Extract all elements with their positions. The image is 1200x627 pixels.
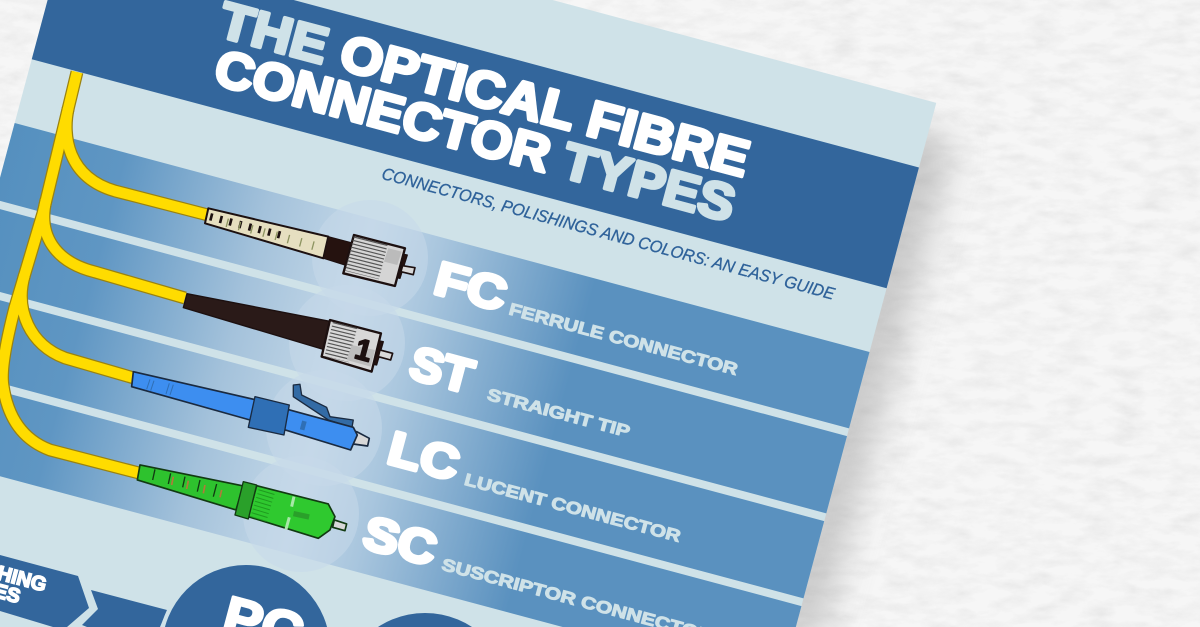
ST label: STRAIGHT TIP — [485, 385, 632, 441]
second arrow — [82, 590, 167, 627]
ST label — [405, 336, 640, 446]
LC label: LC — [383, 421, 465, 491]
ST label: ST — [405, 336, 480, 403]
SC label: SC — [358, 505, 442, 576]
connector rows — [0, 123, 870, 627]
FC connector — [205, 208, 415, 286]
LC connector — [132, 372, 369, 450]
poster drop shadow — [770, 125, 955, 627]
poster rotated layout — [0, 0, 936, 627]
title: CONNECTOR TYPES — [209, 39, 741, 232]
connection circles — [243, 200, 428, 572]
FC label: FERRULE CONNECTOR — [507, 300, 740, 379]
poster base — [0, 0, 936, 627]
LC label — [383, 421, 690, 551]
second polishing circle — [339, 613, 511, 627]
poster — [0, 0, 936, 627]
subtitle: CONNECTORS, POLISHINGS AND COLORS: AN EASY GUIDE — [380, 164, 837, 304]
row labels — [358, 250, 791, 627]
LC label: LUCENT CONNECTOR — [462, 470, 683, 546]
SC connector — [137, 465, 347, 538]
ST number tag: 1 — [351, 333, 376, 369]
ST connector — [183, 294, 393, 372]
yellow fibre cables — [2, 72, 208, 473]
SC label — [358, 505, 722, 627]
FC label: FC — [429, 251, 513, 321]
PC circle — [158, 561, 334, 627]
header band — [32, 0, 919, 288]
polishing types arrow — [0, 547, 89, 627]
FC label — [429, 251, 747, 384]
